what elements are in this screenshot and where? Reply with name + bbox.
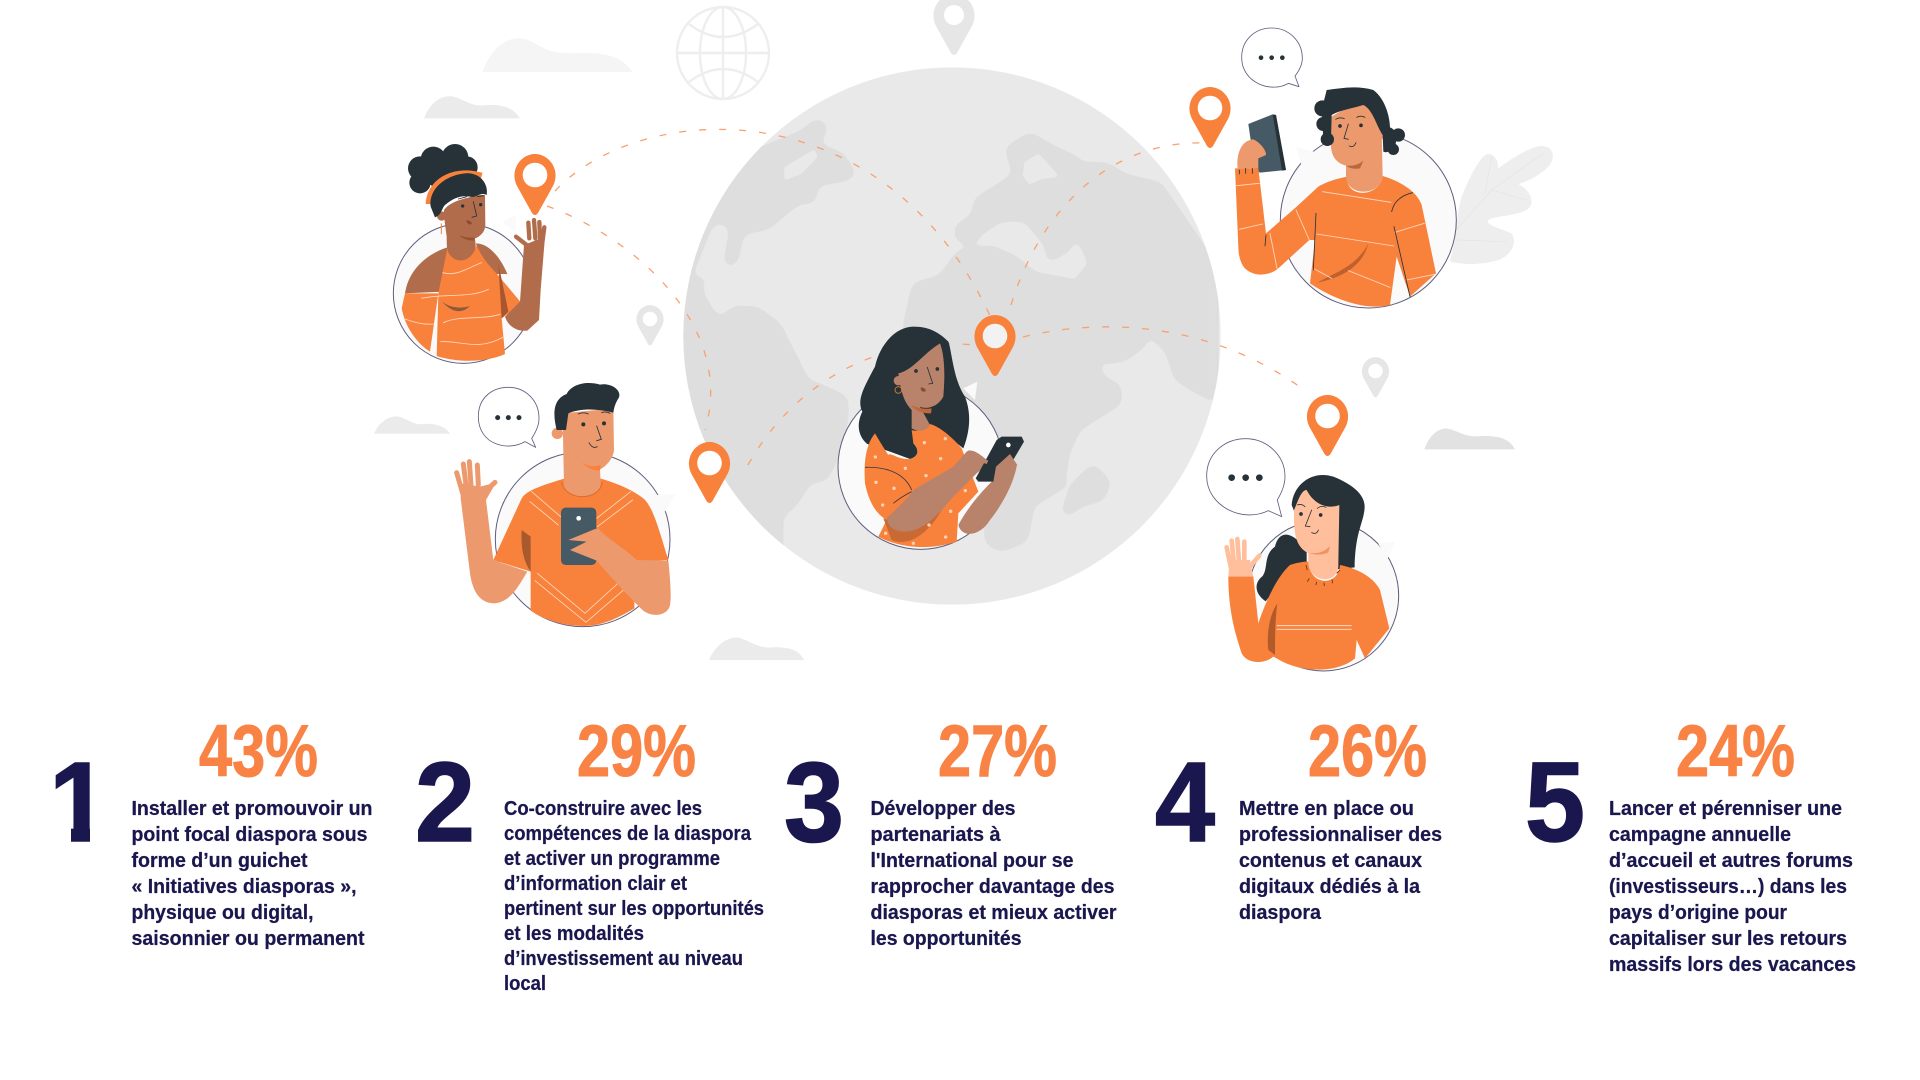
description 2 xyxy=(504,798,764,995)
rank number 3: 3 xyxy=(784,739,844,865)
rank number 4: 4 xyxy=(1155,739,1215,865)
column 1 xyxy=(40,711,372,950)
description 1: forme d’un guichet xyxy=(132,850,308,872)
description 2: d’information clair et xyxy=(504,873,687,895)
person 3: central woman with phone xyxy=(838,327,1024,549)
description 3: les opportunités xyxy=(870,928,1022,950)
illustration: world network of diaspora members xyxy=(374,0,1553,671)
percentage 43%: 43% xyxy=(199,711,318,792)
description 5: capitaliser sur les retours xyxy=(1609,928,1847,950)
percentage 24%: 24% xyxy=(1676,711,1795,792)
description 3: rapprocher davantage des xyxy=(870,876,1114,898)
statistics row: five ranked recommendations xyxy=(40,711,1856,995)
description 2: et les modalités xyxy=(504,923,644,945)
percentage 29%: 29% xyxy=(577,711,696,792)
leaf behind man xyxy=(1450,146,1553,264)
cloud: bottom xyxy=(709,638,804,660)
cloud: top left large xyxy=(482,38,632,72)
person 5: woman waving xyxy=(1207,439,1399,671)
rank number 5: 5 xyxy=(1525,739,1585,865)
icon: grey pin left xyxy=(636,305,664,345)
speech bubble xyxy=(478,387,539,447)
description 2: local xyxy=(504,973,546,995)
rank number 1: 1 xyxy=(49,739,109,865)
description 2: compétences de la diaspora xyxy=(504,823,752,845)
description 2: Co-construire avec les xyxy=(504,798,702,820)
description 4 xyxy=(1239,798,1442,924)
description 5 xyxy=(1609,798,1856,976)
description 3: l'International pour se xyxy=(870,850,1074,872)
icon: line globe xyxy=(677,7,769,99)
description 4: professionnaliser des xyxy=(1239,824,1442,846)
description 5: pays d’origine pour xyxy=(1609,902,1787,924)
description 5: (investisseurs…) dans les xyxy=(1609,876,1847,898)
icon: grey pin right xyxy=(1362,357,1389,397)
description 5: Lancer et pérenniser une xyxy=(1609,798,1842,820)
description 4: digitaux dédiés à la xyxy=(1239,876,1421,898)
rank number 2: 2 xyxy=(415,739,475,865)
description 3: partenariats à xyxy=(870,824,1001,846)
speech bubble xyxy=(1242,28,1302,87)
description 4: Mettre en place ou xyxy=(1239,798,1414,820)
speech bubble xyxy=(1207,439,1285,517)
description 2: et activer un programme xyxy=(504,848,720,870)
location pins: orange xyxy=(514,87,1348,503)
percentage 26%: 26% xyxy=(1308,711,1427,792)
icon: grey pin top xyxy=(933,0,975,55)
column 3 xyxy=(784,711,1117,950)
cloud: top left small xyxy=(424,96,520,118)
description 4: diaspora xyxy=(1239,902,1322,924)
description 1: saisonnier ou permanent xyxy=(132,928,365,950)
description 5: massifs lors des vacances xyxy=(1609,954,1856,976)
description 3: Développer des xyxy=(870,798,1016,820)
description 1 xyxy=(132,798,372,950)
person 2: man with phone waving xyxy=(457,383,676,627)
description 1: physique ou digital, xyxy=(132,902,314,924)
description 3 xyxy=(870,798,1117,950)
description 4: contenus et canaux xyxy=(1239,850,1422,872)
description 5: campagne annuelle xyxy=(1609,824,1791,846)
column 4 xyxy=(1155,711,1442,924)
column 5 xyxy=(1525,711,1856,976)
description 2: pertinent sur les opportunités xyxy=(504,898,764,920)
dashed route arcs xyxy=(547,129,1307,465)
description 1: Installer et promouvoir un xyxy=(132,798,372,820)
column 2 xyxy=(415,711,764,995)
person 4: man holding phone xyxy=(1235,28,1456,308)
person 1: woman with headband waving xyxy=(393,144,545,363)
description 2: d’investissement au niveau xyxy=(504,948,743,970)
description 1: point focal diaspora sous xyxy=(132,824,368,846)
cloud: left xyxy=(374,416,450,434)
cloud: right xyxy=(1424,428,1515,449)
description 1: « Initiatives diasporas », xyxy=(132,876,356,898)
description 3: diasporas et mieux activer xyxy=(870,902,1117,924)
globe with continents xyxy=(673,67,1221,605)
lakes and inland seas xyxy=(787,153,1055,182)
percentage 27%: 27% xyxy=(938,711,1057,792)
description 5: d’accueil et autres forums xyxy=(1609,850,1853,872)
